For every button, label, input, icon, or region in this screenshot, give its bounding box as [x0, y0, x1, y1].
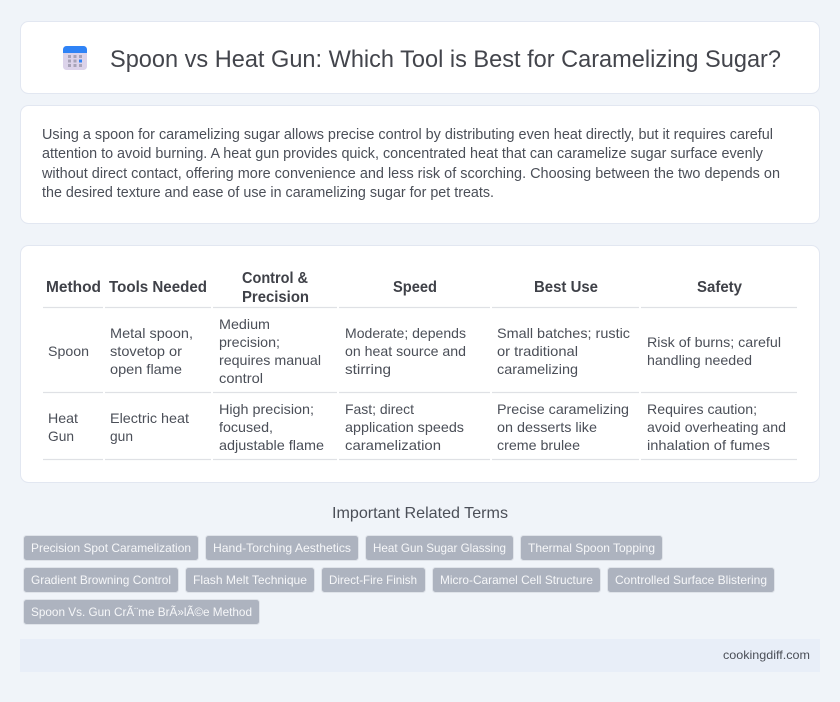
table row: heat gun: Fast; direct: [345, 401, 414, 417]
table rules: [43, 308, 797, 460]
table row: heat gun: application speeds: [345, 419, 464, 435]
icon: calendar grid: [63, 46, 87, 70]
table row: spoon: stovetop or: [110, 343, 182, 359]
related term tags: Gradient Browning Control: [31, 573, 171, 587]
table row: heat gun: on desserts like: [497, 419, 597, 435]
intro text block: without direct contact, offering more convenience and less risk of scorching. Choosing between the two depends on: [41, 166, 780, 182]
intro text block: the desired texture and ease of use in caramelizing sugar for pet treats.: [42, 185, 494, 201]
related term tags: Spoon Vs. Gun CrÃ¨me BrÃ»lÃ©e Method: [31, 605, 252, 619]
intro text block: [41, 127, 780, 201]
table row: spoon: handling needed: [647, 352, 752, 368]
table row: heat gun: gun: [110, 428, 133, 444]
related term tags: Hand-Torching Aesthetics: [213, 541, 351, 555]
table row: spoon: open flame: [110, 361, 182, 377]
intro text block: attention to avoid burning. A heat gun provides quick, concentrated heat that can caramelize sugar surface evenly: [42, 146, 764, 162]
related term tags: [24, 536, 774, 624]
footer source text: cookingdiff.com: [723, 648, 810, 662]
table row: heat gun: High precision;: [219, 401, 314, 417]
table row: spoon: [48, 316, 781, 386]
table row: spoon: Medium: [219, 316, 270, 332]
panel: comparison table: [20, 246, 820, 482]
table row: spoon: caramelizing: [497, 361, 578, 377]
table row: heat gun: avoid overheating and: [647, 419, 786, 435]
related term tags: Precision Spot Caramelization: [31, 541, 191, 555]
table row: spoon: or traditional: [497, 343, 578, 359]
table row: heat gun: Requires caution;: [647, 401, 757, 417]
table row: heat gun: [48, 401, 786, 453]
related term tags: Flash Melt Technique: [193, 573, 307, 587]
table row: spoon: on heat source and: [345, 343, 466, 359]
table row: heat gun: creme brulee: [497, 437, 580, 453]
table row: spoon: Risk of burns; careful: [647, 334, 781, 350]
table row: spoon: Metal spoon,: [110, 325, 193, 341]
table row: spoon: Small batches; rustic: [497, 325, 630, 341]
table row: heat gun: adjustable flame: [219, 437, 324, 453]
related term tags: Controlled Surface Blistering: [615, 573, 767, 587]
table row: spoon: precision;: [219, 334, 280, 350]
table row: spoon: Moderate; depends: [345, 325, 466, 341]
table row: heat gun: Electric heat: [110, 410, 189, 426]
related term tags: Heat Gun Sugar Glassing: [373, 541, 506, 555]
table header row: Precision: [242, 289, 309, 306]
heading: related terms: Important Related Terms: [332, 505, 508, 522]
table row: spoon: stirring: [345, 361, 391, 377]
panel: introduction: [20, 106, 820, 224]
table row: spoon: control: [219, 370, 263, 386]
table row: spoon: Spoon: [48, 343, 89, 359]
table row: heat gun: inhalation of fumes: [647, 437, 770, 453]
table row: heat gun: Precise caramelizing: [497, 401, 629, 417]
table row: heat gun: caramelization: [345, 437, 441, 453]
related term tags: Thermal Spoon Topping: [528, 541, 655, 555]
header panel: [20, 22, 820, 94]
footer bar: [20, 639, 820, 672]
table row: heat gun: focused,: [219, 419, 273, 435]
table row: heat gun: Gun: [48, 428, 74, 444]
table row: heat gun: Heat: [48, 410, 78, 426]
table header row: Control &: [242, 270, 308, 287]
intro text block: Using a spoon for caramelizing sugar allows precise control by distributing even heat directly, but it requires careful: [42, 127, 773, 143]
table header row: Method: [46, 279, 101, 296]
table header row: Tools Needed: [109, 279, 207, 296]
related term tags: Direct-Fire Finish: [329, 573, 417, 587]
table header row: [46, 270, 742, 306]
related term tags: Micro-Caramel Cell Structure: [440, 573, 593, 587]
table header row: Best Use: [534, 279, 598, 296]
table row: spoon: requires manual: [219, 352, 321, 368]
title: Spoon vs Heat Gun: Which Tool is Best for Caramelizing Sugar?: [110, 46, 781, 73]
table header row: Speed: [393, 279, 437, 296]
table header row: Safety: [697, 279, 742, 296]
